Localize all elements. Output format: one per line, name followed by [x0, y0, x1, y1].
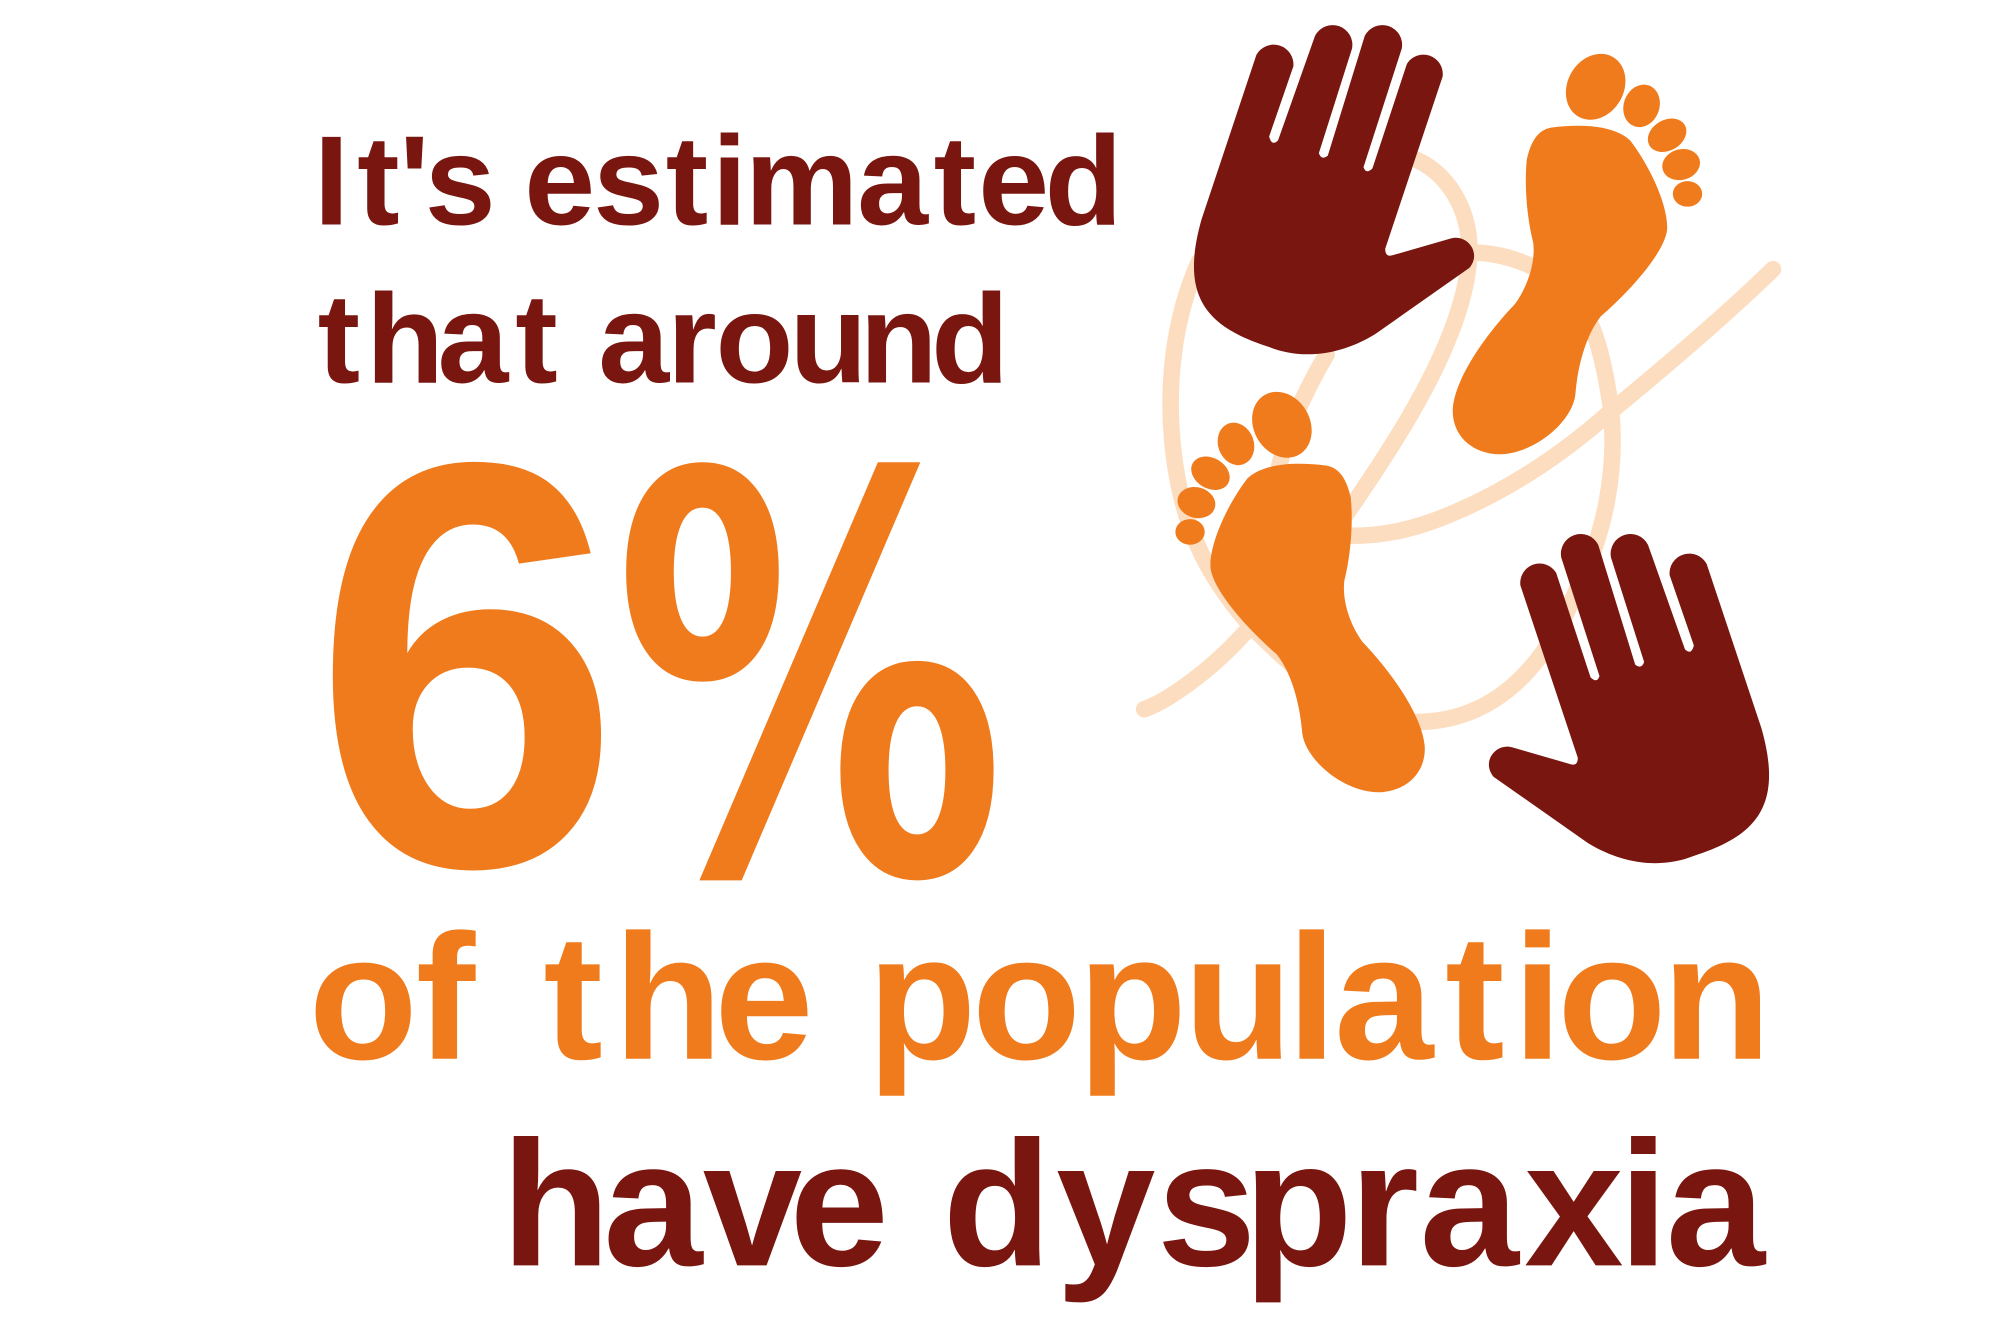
- big number: percent sign: %: [614, 359, 1006, 1003]
- text: have dyspraxia: have dyspraxia: [501, 1103, 1767, 1303]
- icon: upper hand: [1194, 25, 1474, 354]
- icon: upper foot: [1453, 43, 1704, 454]
- text: It's estimated: It's estimated: [314, 111, 1123, 253]
- icon: lower foot: [1174, 381, 1425, 792]
- text: of the population: of the population: [309, 897, 1771, 1097]
- big number: 6: 6: [312, 343, 621, 987]
- text: that around: that around: [318, 269, 1009, 411]
- background squiggle lines: [1144, 156, 1773, 722]
- icon: lower hand: [1489, 534, 1769, 863]
